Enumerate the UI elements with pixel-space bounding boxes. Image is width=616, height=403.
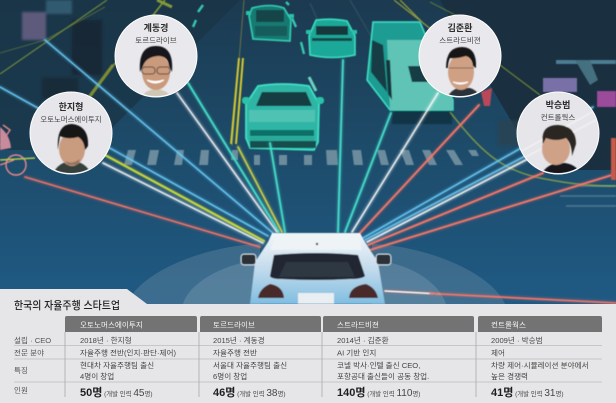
column: 컨트롤웍스: 차량 제어·시뮬레이션 분야에서 bbox=[491, 360, 589, 370]
column: 오토노머스에이투지: 2018년 · 한지형 bbox=[80, 335, 132, 345]
table header: 토르드라이브 bbox=[200, 316, 321, 332]
row labels: 설립 · CEO bbox=[14, 335, 51, 345]
portrait: 한지형 bbox=[30, 92, 112, 176]
car: near bbox=[242, 84, 324, 150]
title: 한국의 자율주행 스타트업 bbox=[14, 299, 120, 312]
portrait: 계동경: 토르드라이브 bbox=[135, 35, 177, 45]
table header: 컨트롤웍스: 컨트롤웍스 bbox=[491, 320, 526, 330]
portrait: 계동경 bbox=[115, 15, 197, 100]
portrait: 김준환: 스트라드비젼 bbox=[439, 35, 481, 45]
column: 오토노머스에이투지: 4명이 창업 bbox=[80, 371, 114, 381]
column: 스트라드비젼: 포항공대 출신들이 공동 창업. bbox=[337, 371, 429, 381]
car: far left bbox=[246, 6, 294, 41]
portrait: 박승범: 컨트롤웍스 bbox=[541, 112, 575, 122]
icon: cyclist bbox=[0, 125, 35, 175]
startup table bbox=[14, 316, 602, 399]
car: middle bbox=[306, 19, 357, 58]
column: 토르드라이브: 46명 (개발 인력 38명) bbox=[213, 386, 285, 399]
column: 오토노머스에이투지 bbox=[80, 335, 177, 399]
portrait: 한지형: 한지형 bbox=[59, 101, 83, 112]
row labels: 특징 bbox=[14, 365, 28, 375]
column: 스트라드비젼: 2014년 · 김준환 bbox=[337, 335, 389, 345]
portrait: 박승범: 박승범 bbox=[546, 99, 570, 110]
column: 스트라드비젼: 코넬 박사·인텔 출신 CEO, bbox=[337, 360, 420, 370]
car: white hatchback bbox=[241, 233, 391, 304]
column: 토르드라이브 bbox=[213, 335, 287, 399]
bus bbox=[367, 22, 453, 124]
table header: 오토노머스에이투지 bbox=[65, 316, 197, 332]
portrait: 계동경: 계동경 bbox=[144, 22, 168, 33]
column: 컨트롤웍스 bbox=[491, 335, 589, 399]
row labels: 전문 분야 bbox=[14, 348, 44, 358]
column: 컨트롤웍스: 41명 (개발 인력 31명) bbox=[491, 386, 563, 399]
column: 토르드라이브: 6명이 창업 bbox=[213, 371, 247, 381]
road markings bbox=[124, 0, 616, 206]
teal cars and bus bbox=[242, 6, 453, 150]
table header: 컨트롤웍스 bbox=[478, 316, 602, 332]
portrait: 김준환 bbox=[419, 15, 501, 100]
column: 오토노머스에이투지: 50명 (개발 인력 45명) bbox=[80, 386, 152, 399]
table header: 스트라드비젼: 스트라드비젼 bbox=[337, 320, 379, 330]
portrait: 한지형: 오토노머스에이투지 bbox=[40, 115, 102, 124]
column: 스트라드비젼: 140명 (개발 인력 110명) bbox=[337, 386, 420, 399]
column: 토르드라이브: 2015년 · 계동경 bbox=[213, 335, 265, 345]
sensor rays glow bbox=[0, 40, 616, 303]
column: 스트라드비젼 bbox=[337, 335, 429, 399]
road scene background bbox=[0, 0, 616, 304]
row labels: 인원 bbox=[14, 385, 28, 395]
portrait: 박승범 bbox=[517, 92, 599, 176]
sonar arcs around the car bbox=[127, 244, 505, 304]
column: 토르드라이브: 자율주행 전반 bbox=[213, 348, 257, 358]
table header: 토르드라이브: 토르드라이브 bbox=[213, 320, 255, 330]
title panel background bbox=[0, 289, 616, 403]
table header: 스트라드비젼 bbox=[323, 316, 474, 332]
column: 컨트롤웍스: 2009년 · 박승범 bbox=[491, 335, 543, 345]
column: 오토노머스에이투지: 자율주행 전반(인지·판단·제어) bbox=[80, 348, 177, 358]
column: 스트라드비젼: AI 기반 인지 bbox=[337, 348, 376, 358]
portrait: 김준환: 김준환 bbox=[448, 22, 473, 33]
column: 컨트롤웍스: 높은 경쟁력 bbox=[491, 371, 528, 381]
sensor rays bbox=[0, 40, 616, 303]
column: 컨트롤웍스: 제어 bbox=[491, 348, 505, 358]
icon: pedestrian and traffic signals bbox=[481, 60, 616, 180]
row labels bbox=[14, 335, 51, 395]
thin background lines bbox=[0, 0, 616, 186]
column: 오토노머스에이투지: 현대차 자율주행팀 출신 bbox=[80, 360, 154, 370]
column: 토르드라이브: 서울대 자율주행팀 출신 bbox=[213, 360, 287, 370]
table header: 오토노머스에이투지: 오토노머스에이투지 bbox=[80, 320, 143, 330]
